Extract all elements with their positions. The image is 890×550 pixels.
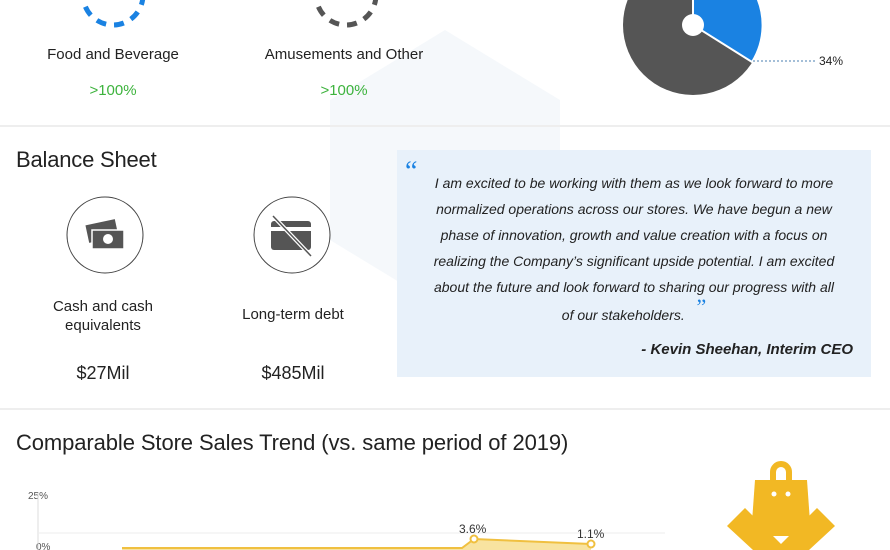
quote panel [397, 150, 871, 377]
heading: balance sheet: Balance Sheet [16, 147, 157, 172]
pie chart [623, 0, 843, 95]
line chart [28, 491, 665, 550]
label: amusements: Amusements and Other [265, 46, 423, 63]
quote text: phase of innovation, growth and value creation with a focus on [441, 227, 827, 243]
value: cash: $27Mil [76, 363, 130, 383]
icon: amusements [316, 0, 378, 28]
background watermark [330, 30, 560, 280]
icon: no card [254, 196, 330, 274]
quote text: realizing the Company’s significant upside potential. I am excited [434, 253, 834, 269]
icon: cash [66, 196, 144, 274]
quote text: normalized operations across our stores. We have begun a new [436, 201, 832, 217]
line chart: 3.6% [459, 522, 487, 536]
pie chart: 34% [819, 54, 843, 68]
quote text: about the future and look forward to sharing our progress with all [434, 279, 834, 295]
icon: food [83, 0, 146, 28]
value: amusements: >100% [320, 82, 368, 99]
label: cash: Cash and cash equivalents [53, 298, 153, 334]
quote text: I am excited to be working with them as we look forward to more [435, 175, 833, 191]
quote text: of our stakeholders. ” [562, 294, 706, 323]
line chart: 25% [28, 491, 48, 502]
attribution: - Kevin Sheehan, Interim CEO [641, 341, 853, 358]
value: food: >100% [89, 82, 137, 99]
value: debt: $485Mil [261, 363, 325, 383]
label: food: Food and Beverage [47, 46, 179, 63]
heading: sales trend: Comparable Store Sales Trend (vs. same period of 2019) [16, 430, 568, 455]
quote marks: “ [405, 156, 417, 187]
quote text [434, 175, 835, 323]
icon: shopping bag [727, 461, 835, 550]
label: debt: Long-term debt [242, 306, 344, 323]
line chart: 1.1% [577, 527, 605, 541]
